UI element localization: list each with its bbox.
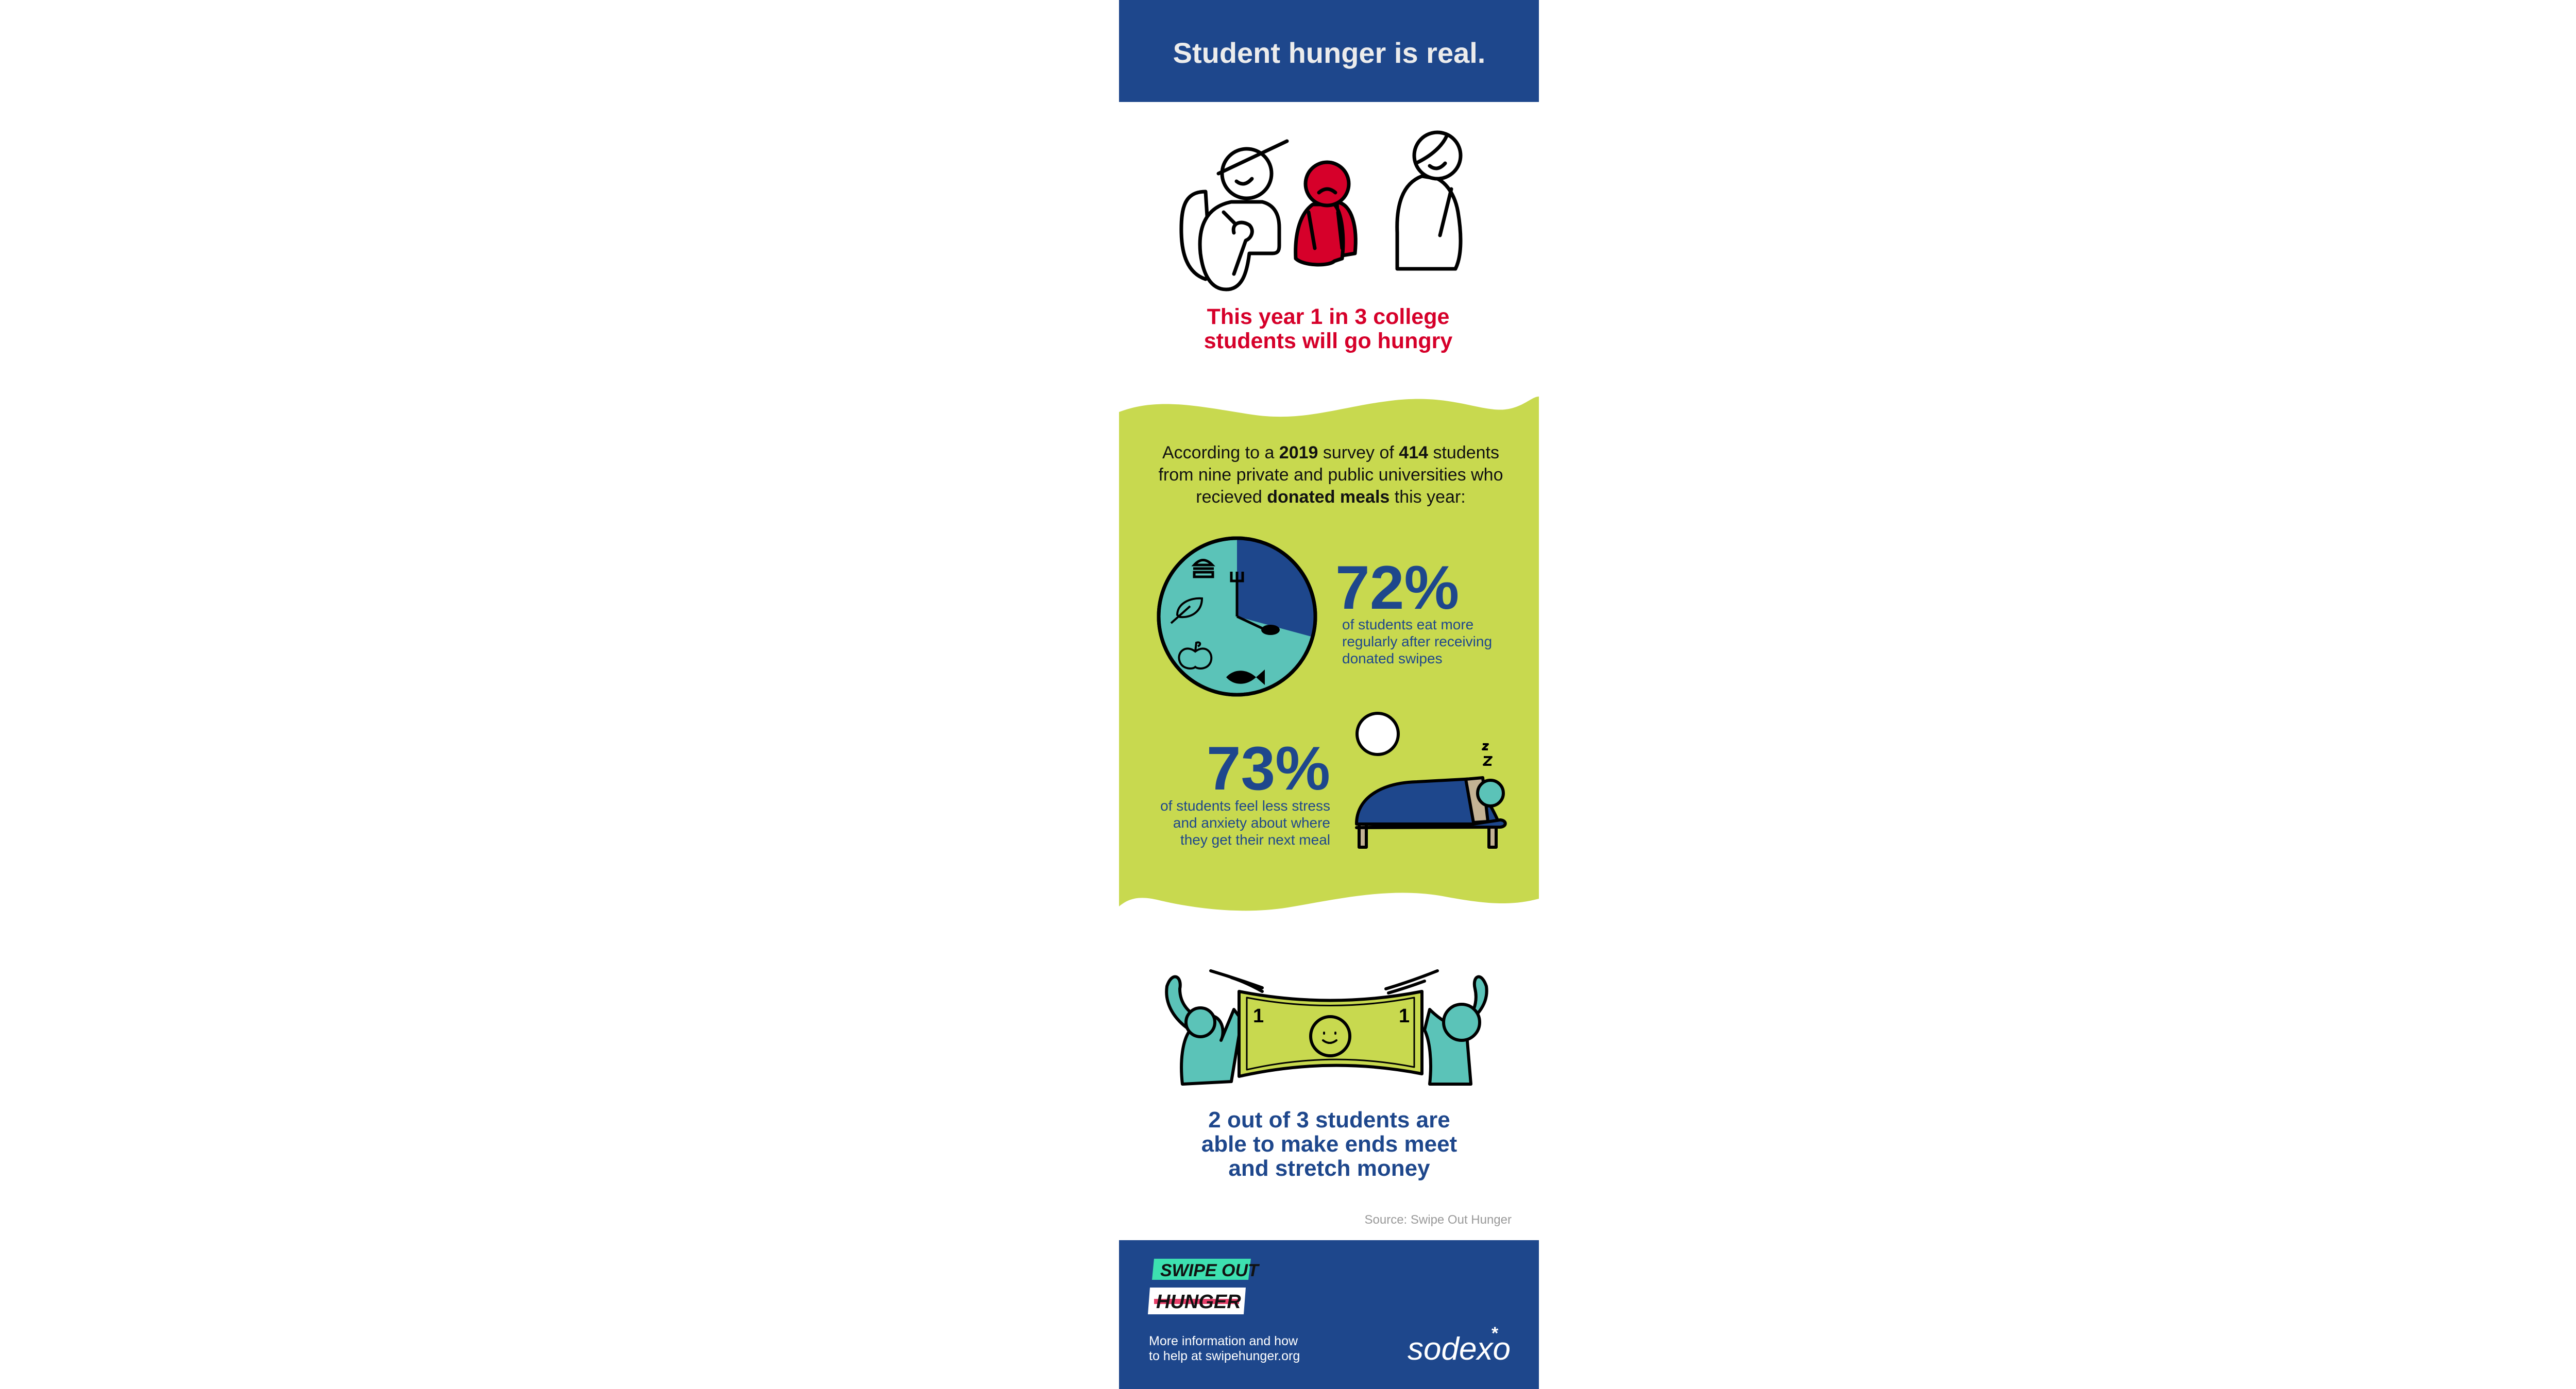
footer info text: to help at swipehunger.org [1149,1349,1300,1363]
blue headline: and stretch money [1228,1156,1430,1181]
icon: moon [1357,713,1398,754]
right student [1397,132,1461,269]
red headline: This year 1 in 3 college [1207,304,1449,329]
logo: swipe out hunger: HUNGER [1156,1291,1241,1313]
stat: 73% [1160,734,1330,848]
stat: 72%: 72% [1335,553,1459,622]
logo: swipe out hunger [1148,1259,1260,1314]
footer panel [1119,1240,1539,1389]
logo: swipe out hunger: SWIPE OUT [1160,1261,1260,1280]
footer info text: More information and how [1149,1334,1298,1348]
illustration: students stretching a dollar [1166,971,1487,1084]
logo: sodexo: * [1492,1324,1499,1343]
student with backpack [1181,141,1287,289]
panel: green survey section [1119,397,1539,911]
intro text: from nine private and public universities who [1158,465,1503,485]
stat: 73%: they get their next meal [1180,832,1330,848]
red headline [1204,304,1452,353]
dollar bill: 1 [1253,1005,1264,1027]
dollar bill [1239,991,1422,1076]
stat: 72%: donated swipes [1342,650,1443,666]
source note: Source: Swipe Out Hunger [1365,1213,1512,1227]
intro text: recieved donated meals this year: [1196,487,1466,507]
icon: fork hand [1231,572,1243,616]
blue headline: 2 out of 3 students are [1208,1107,1450,1133]
motion lines [1211,971,1437,993]
icon: leaf [1171,598,1202,623]
right teal student [1425,976,1487,1084]
stat: 73%: 73% [1207,734,1330,803]
icon: sleeping student in bed [1357,744,1505,847]
illustration: three students [1181,132,1461,289]
stat: 73%: of students feel less stress [1160,798,1330,814]
icon: fish [1226,670,1265,685]
red headline: students will go hungry [1204,329,1452,353]
logo: sodexo: sodexo [1408,1331,1511,1367]
intro text [1158,443,1503,507]
stat: 72% [1335,553,1492,666]
blue headline [1201,1107,1458,1181]
footer info text [1149,1334,1300,1363]
title: Student hunger is real. [1173,37,1485,69]
icon: burger [1193,560,1214,577]
header banner [1119,0,1539,102]
intro text: According to a 2019 survey of 414 students [1162,443,1499,462]
blue headline: able to make ends meet [1201,1131,1458,1157]
chart: clock pie [1159,538,1315,695]
red hungry student [1296,162,1355,265]
icon: apple [1179,642,1211,668]
stat: 73%: and anxiety about where [1173,815,1330,831]
icon: spoon hand [1237,616,1262,628]
dollar bill: 1 [1399,1005,1410,1027]
stat: 72%: regularly after receiving [1342,633,1492,649]
left teal student [1166,976,1242,1084]
stat: 72%: of students eat more [1342,616,1473,632]
